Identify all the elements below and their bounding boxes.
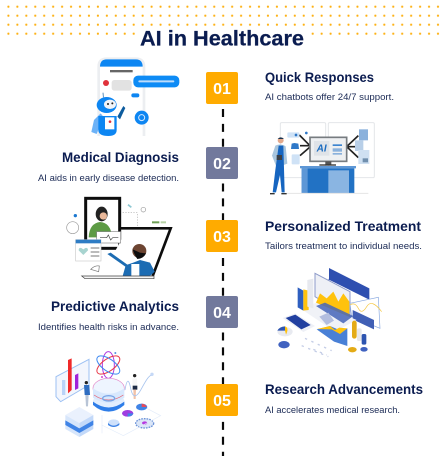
title: AI in Healthcare [140,26,304,50]
text block: Medical Diagnosis: Medical Diagnosis [62,149,179,165]
text block: Predictive Analytics: Identifies health risks in advance. [38,322,179,333]
text block: Research Advancements: Research Advancements [265,381,423,397]
text block: Quick Responses: AI chatbots offer 24/7 support. [265,92,394,103]
text block: Quick Responses: Quick Responses [265,69,374,85]
badge 02 [206,147,238,179]
badge 01: 01 [213,81,231,98]
badge 03 [206,220,238,252]
illustration: telemedicine video call [67,198,171,279]
text block: Predictive Analytics [38,298,179,333]
text block: Research Advancements [265,381,423,416]
illustration: doctor with AI computer [270,123,374,194]
text block: Medical Diagnosis [38,149,179,184]
illustration: analytics laptop and charts [277,268,382,357]
badge 01 [206,72,238,104]
badge 05: 05 [213,393,231,410]
text block: Personalized Treatment [265,218,422,252]
text block: Quick Responses [265,69,394,103]
dotted background pattern [4,2,440,38]
text block: Research Advancements: AI accelerates medical research. [265,405,400,416]
text block: Medical Diagnosis: AI aids in early disease detection. [38,173,179,184]
text block: Personalized Treatment: Tailors treatment to individual needs. [265,241,422,252]
badge 02: 02 [213,156,231,173]
text block: Predictive Analytics: Predictive Analytics [51,298,179,314]
text block: Personalized Treatment: Personalized Treatment [265,218,421,234]
badge 03: 03 [213,229,231,246]
badge 04: 04 [213,305,231,322]
badge 05 [206,384,238,416]
central dashed timeline [222,109,224,456]
badge 04 [206,296,238,328]
illustration: doctor with AI computer: AI [316,144,327,155]
illustration: chatbot phone and robot [91,57,179,136]
illustration: research lab isometric [56,352,161,437]
